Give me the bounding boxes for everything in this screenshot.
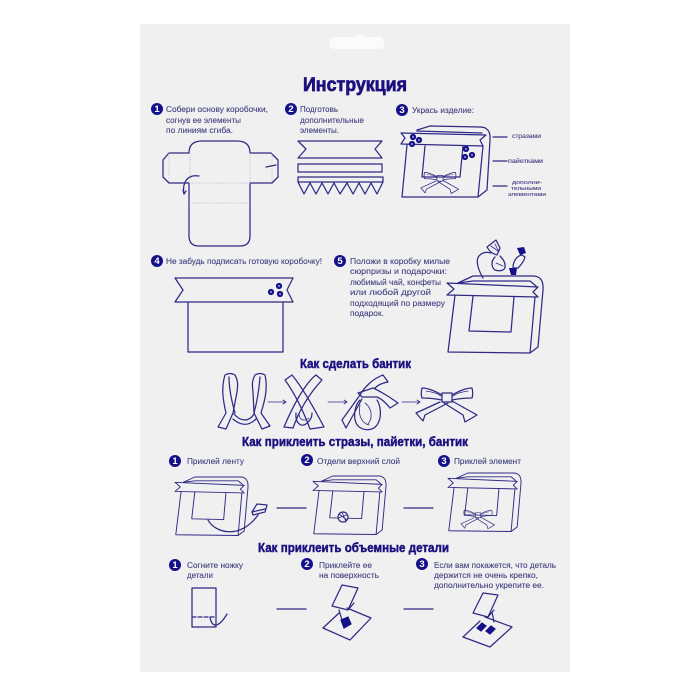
step 2 ribbon strips — [298, 141, 383, 194]
step 5 text: 5 — [337, 256, 343, 267]
step 3 callouts: дополни- — [512, 180, 542, 186]
glue step 3 label: 3 — [441, 456, 447, 467]
step 1 text: согнув ее элементы — [166, 115, 241, 125]
bow step 4 finished bow — [416, 388, 477, 422]
volume step 1 label: 1 — [172, 560, 178, 571]
step 3 text — [396, 104, 474, 116]
glue step 2 label: 2 — [304, 455, 310, 466]
step 3 callouts: стразами — [512, 133, 542, 140]
volume step 2 label: на поверхность — [319, 570, 380, 580]
step 5 text: подходящий по размеру — [350, 298, 446, 308]
bow step 2 — [284, 375, 324, 429]
volume step 3 label: Если вам покажется, что деталь — [434, 560, 556, 570]
step 3 callouts — [493, 133, 546, 198]
arrow — [277, 608, 306, 610]
glue box 1 with sticker — [175, 477, 267, 536]
glue step 2 label — [301, 454, 400, 466]
step 3 callouts: пайетками — [508, 158, 544, 165]
panel: instruction sheet background — [140, 24, 570, 672]
step 1 box net diagram — [163, 141, 278, 246]
volume step 3 label: 3 — [419, 559, 425, 570]
fold diagram — [192, 588, 227, 627]
glue step 1 label: 1 — [172, 456, 178, 467]
arrow — [404, 507, 433, 509]
volume step 2 label: 2 — [304, 559, 310, 570]
hang hole — [329, 34, 384, 49]
part reinforced — [463, 593, 512, 647]
volume step 1 label: детали — [187, 570, 213, 580]
step 1 text — [151, 103, 268, 135]
bow step 1 — [218, 374, 270, 429]
step 4 labelled box — [175, 278, 293, 352]
volume step 3 label: держится не очень крепко, — [434, 570, 538, 580]
step 2 text — [285, 103, 364, 135]
glue step 1 label — [169, 455, 245, 467]
step 1 text: по линиям сгиба. — [166, 125, 233, 135]
part on surface — [323, 585, 371, 640]
arrow — [328, 400, 347, 404]
step 2 text: Подготовь — [300, 104, 338, 114]
bow step 3 — [342, 375, 398, 430]
step 3 decorated box — [401, 126, 490, 197]
step 4 text: 4 — [154, 256, 160, 267]
step 2 text: элементы. — [300, 125, 339, 135]
glue step 2 label: Отдели верхний слой — [317, 456, 400, 466]
step 5 text: или любой другой — [350, 287, 431, 297]
step 5 text: Положи в коробку милые — [350, 256, 450, 266]
step 4 text: Не забудь подписать готовую коробочку! — [166, 256, 322, 266]
step 5 text: любимый чай, конфеты — [350, 277, 441, 287]
glue step 3 label — [438, 455, 521, 467]
step 2 text: дополнительные — [300, 115, 364, 125]
arrow — [404, 608, 433, 610]
glue box 3 with bow — [448, 473, 521, 532]
arrow — [268, 400, 286, 404]
step 3 text: Укрась изделие: — [412, 105, 474, 115]
heading: bow: Как сделать бантик — [300, 357, 412, 371]
heading: volume parts: Как приклеить объемные детали — [258, 541, 449, 555]
glue step 1 label: Приклей ленту — [187, 456, 245, 466]
glue step 3 label: Приклей элемент — [454, 456, 521, 466]
step 5 text: подарок. — [350, 308, 384, 318]
step 2 text: 2 — [288, 104, 294, 115]
volume step 1 label: Согните ножку — [187, 560, 244, 570]
volume step 3 label — [416, 558, 556, 590]
step 5 text — [334, 255, 450, 318]
volume step 1 label — [169, 559, 244, 580]
volume step 3 label: дополнительно укрепите ее. — [434, 580, 544, 590]
arrow — [402, 400, 420, 404]
step 3 callouts: тельными — [511, 186, 541, 192]
step 1 text: Собери основу коробочки, — [166, 104, 268, 114]
volume step 2 label: Приклейте ее — [319, 560, 372, 570]
volume step 2 label — [301, 558, 380, 580]
step 3 text: 3 — [399, 105, 405, 116]
step 5 box with candies — [447, 240, 543, 353]
glue box 2 with element — [313, 476, 386, 535]
arrow — [277, 507, 306, 509]
title: Инструкция — [303, 75, 407, 96]
heading: glue: Как приклеить стразы, пайетки, бантик — [242, 435, 469, 449]
step 5 text: сюрпризы и подарочки: — [350, 266, 447, 276]
step 3 callouts: элементами — [508, 192, 546, 198]
step 1 text: 1 — [154, 104, 160, 115]
